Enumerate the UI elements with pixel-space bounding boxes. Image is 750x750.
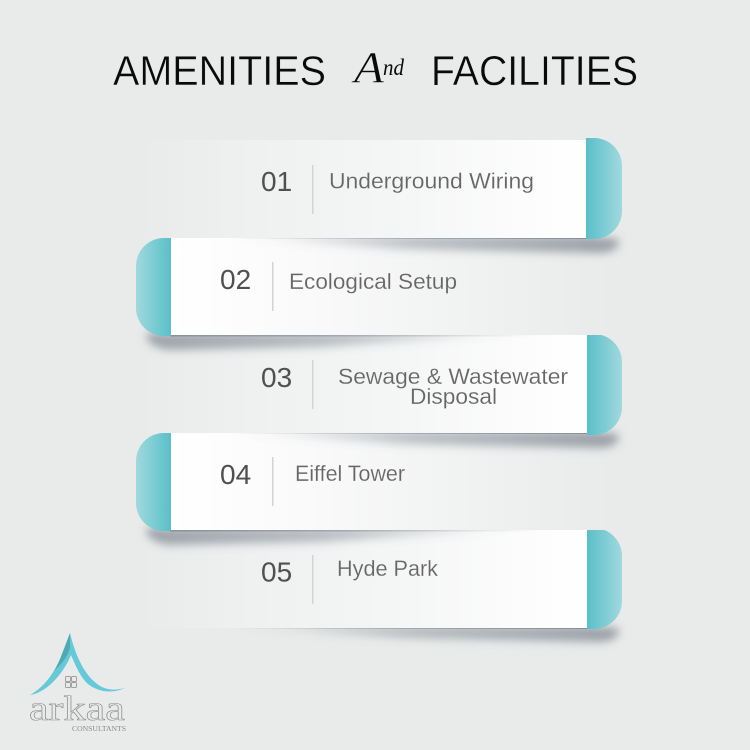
number 01: 01	[261, 166, 292, 197]
icon: roof	[30, 633, 125, 695]
label: Ecological Setup: Ecological Setup	[289, 269, 457, 294]
title: nd	[383, 55, 404, 80]
label: Hyde Park: Hyde Park	[337, 556, 439, 581]
number 03: 03	[261, 362, 292, 393]
number 05: 05	[261, 556, 292, 588]
panel: item 05	[140, 528, 622, 642]
number 04: 04	[220, 459, 251, 490]
panel: item 02	[136, 238, 610, 350]
label: Sewage & Wastewater Disposal: Sewage & Wastewater	[338, 364, 569, 389]
label: Eiffel Tower: Eiffel Tower	[295, 461, 405, 486]
tagline: CONSULTANTS	[72, 725, 126, 733]
label: Underground Wiring: Underground Wiring	[329, 168, 534, 194]
label: Sewage & Wastewater Disposal	[338, 364, 569, 409]
icon: window	[66, 676, 76, 688]
wordmark: arkaa	[29, 689, 126, 728]
panel: item 03	[140, 334, 622, 448]
title: FACILITIES	[431, 47, 638, 94]
logo: arkaa consultants	[29, 633, 126, 733]
title	[113, 43, 638, 94]
title: A	[351, 43, 385, 92]
title: AMENITIES	[113, 47, 326, 94]
label: Sewage & Wastewater Disposal: Disposal	[410, 384, 497, 409]
panel: item 01	[140, 138, 622, 253]
number 02: 02	[220, 264, 251, 295]
panel: item 04	[136, 433, 610, 545]
